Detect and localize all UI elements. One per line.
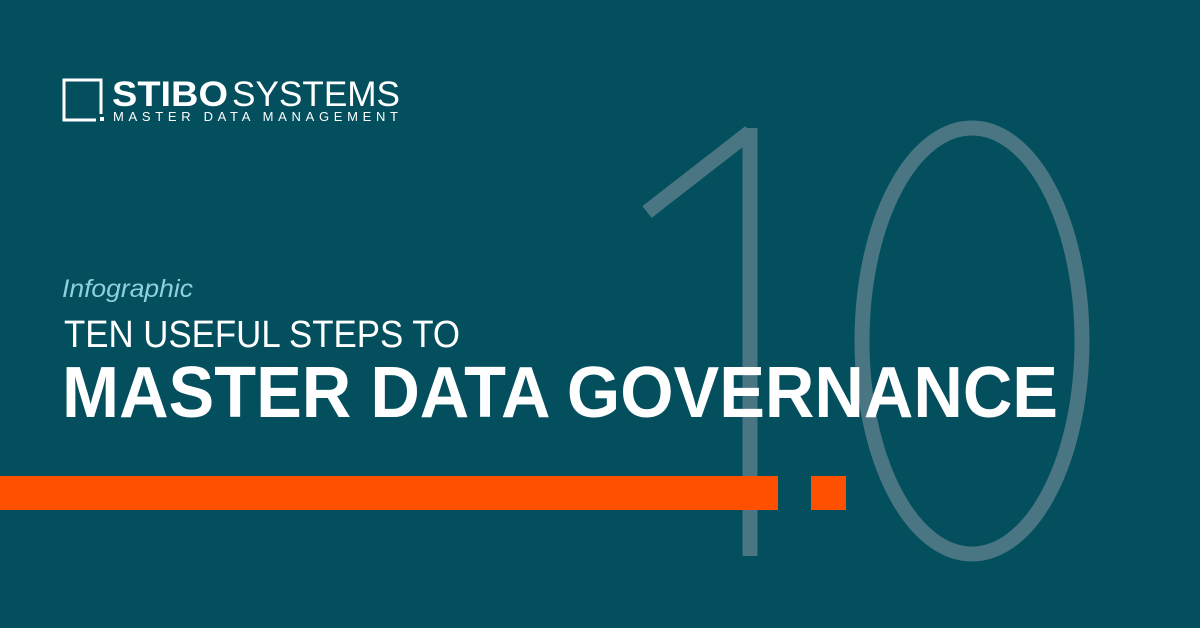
big numeral 10 bbox=[647, 128, 1082, 556]
logo tagline: MASTER DATA MANAGEMENT bbox=[113, 109, 398, 124]
orange square bbox=[811, 476, 846, 510]
logo bbox=[64, 75, 400, 124]
logo mark bbox=[64, 80, 101, 120]
logo: SYSTEMS bbox=[232, 75, 400, 114]
title: MASTER DATA GOVERNANCE bbox=[62, 353, 1058, 433]
subtitle: TEN USEFUL STEPS TO bbox=[64, 314, 460, 356]
kicker: Infographic bbox=[62, 275, 194, 303]
logo wordmark: STIBO bbox=[112, 75, 228, 114]
orange bar bbox=[0, 476, 778, 510]
